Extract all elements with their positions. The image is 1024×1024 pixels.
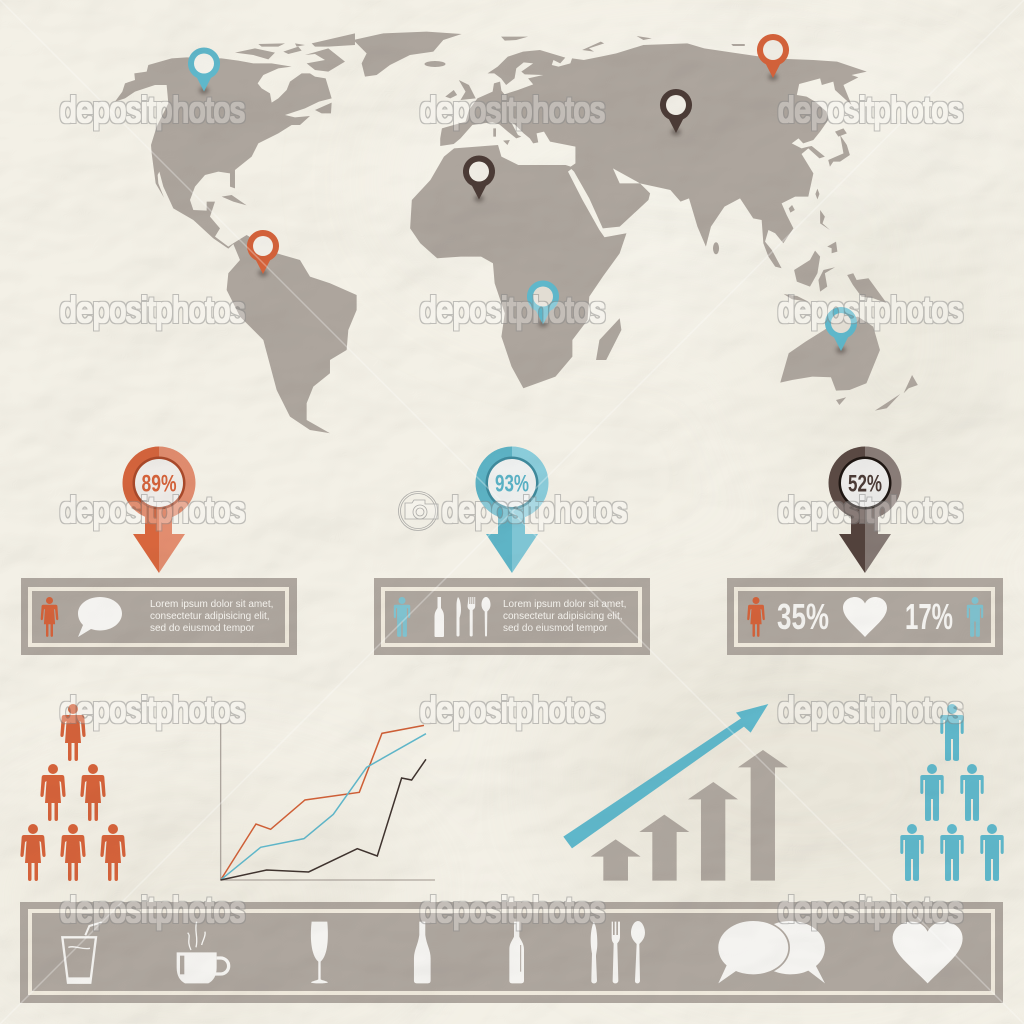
map pin: Australia blue	[825, 307, 857, 354]
panel: love statistics	[727, 578, 1003, 655]
map: Greenland	[353, 32, 462, 77]
growth chart	[563, 704, 788, 881]
map: New Guinea	[847, 273, 887, 303]
text: lorem ipsum: sed do eiusmod tempor	[150, 623, 255, 634]
map: Borneo	[794, 251, 820, 287]
watermark: depositphotos grid: depositphotos	[778, 89, 963, 130]
map pin: Central Asia dark	[660, 89, 692, 136]
map: New Zealand	[875, 375, 918, 411]
big pin: 52 percent dark	[828, 446, 902, 573]
map: Philippines	[820, 210, 837, 253]
text: lorem ipsum: consectetur adipisicing elit,	[503, 611, 623, 622]
watermark: camera logo	[398, 492, 438, 530]
big pin: 52 percent dark: 52%	[848, 470, 882, 498]
arrow: grey bar 4	[738, 750, 788, 881]
icon: spoon	[482, 597, 490, 636]
icon: woman orange	[41, 597, 58, 637]
icon: fork	[467, 597, 475, 636]
map pin: Siberia orange	[757, 34, 789, 80]
map: Australia	[780, 317, 880, 391]
line chart	[221, 723, 435, 880]
icon: knife	[591, 922, 597, 983]
icon: woman orange	[747, 597, 765, 637]
map: Newfoundland and arctic islands	[235, 33, 355, 113]
icon: coffee cup	[177, 922, 229, 983]
map: Japan	[828, 128, 850, 167]
arrow: grey bar 3	[688, 782, 738, 881]
arrow: grey bar 2	[639, 815, 689, 881]
watermark: depositphotos grid: depositphotos	[60, 489, 245, 530]
watermark: depositphotos grid: depositphotos	[60, 289, 245, 330]
icons left part	[62, 922, 431, 983]
arrow: grey bar 1	[591, 839, 641, 881]
map: Sulawesi	[818, 267, 835, 292]
text: lorem ipsum: sed do eiusmod tempor	[503, 623, 608, 634]
map: Arctic islands	[501, 36, 745, 52]
icons right part	[509, 921, 963, 983]
pyramid: men	[900, 704, 1004, 881]
world map	[115, 32, 918, 433]
big pin: 89 percent orange: 89%	[142, 470, 176, 498]
icon: man blue	[394, 597, 410, 637]
text: lorem ipsum: Lorem ipsum dolor sit amet,	[503, 599, 626, 610]
chart axes	[221, 723, 435, 880]
watermark: depositphotos grid: depositphotos	[778, 489, 963, 530]
icon: heart	[843, 597, 887, 637]
icon: speech bubbles	[718, 921, 825, 983]
icon: man blue	[967, 597, 983, 637]
map: Americas	[115, 57, 357, 433]
map: Cuba	[222, 195, 247, 205]
watermark: depositphotos grid: depositphotos	[420, 889, 605, 930]
watermark: depositphotos grid: depositphotos	[778, 689, 963, 730]
text: lorem ipsum: consectetur adipisicing elit,	[150, 611, 270, 622]
watermark: depositphotos grid: depositphotos	[442, 489, 627, 530]
icon: champagne flute	[311, 922, 328, 983]
map: Eurasia and Africa	[410, 36, 918, 411]
map: Madagascar	[596, 318, 621, 360]
icon: heart	[893, 922, 963, 983]
line: orange series	[221, 725, 424, 880]
map: Mediterranean islands	[493, 128, 510, 145]
icon: glass with straw	[62, 922, 102, 983]
watermark: depositphotos grid: depositphotos	[60, 89, 245, 130]
icon: speech bubble	[78, 597, 122, 637]
watermark: depositphotos grid: depositphotos	[778, 889, 963, 930]
map: Iceland	[424, 61, 446, 67]
watermark: depositphotos grid	[60, 89, 963, 930]
panel: icon strip	[20, 902, 1003, 1003]
line: dark series	[221, 759, 426, 880]
stat: 35 percent: 35%	[777, 596, 829, 637]
stat: 17 percent: 17%	[905, 596, 953, 637]
big pin: 89 percent orange	[122, 446, 196, 573]
map pin: North Africa dark	[463, 155, 495, 202]
map pin: South America orange	[247, 230, 279, 276]
map: Java	[784, 294, 808, 302]
map pin: Central Africa blue	[527, 280, 559, 327]
map: Taiwan and Hainan	[789, 189, 819, 213]
icon: knife	[456, 597, 461, 636]
watermark: depositphotos grid: depositphotos	[60, 889, 245, 930]
map: Sri Lanka	[713, 242, 719, 254]
icon: bottle	[434, 597, 444, 637]
watermark: depositphotos grid: depositphotos	[420, 289, 605, 330]
icon: champagne bottle	[414, 922, 431, 983]
watermark: depositphotos grid: depositphotos	[420, 689, 605, 730]
arrow: blue trend	[563, 704, 768, 848]
pyramid: women	[20, 704, 126, 881]
map pin: North America blue	[188, 47, 220, 94]
watermark: depositphotos grid: depositphotos	[420, 89, 605, 130]
panel: cutlery info	[374, 578, 650, 655]
map: Tasmania	[836, 397, 846, 405]
big pin: 93 percent blue: 93%	[495, 470, 529, 498]
watermark: depositphotos grid: depositphotos	[60, 689, 245, 730]
watermark: depositphotos grid: depositphotos	[778, 289, 963, 330]
big pin: 93 percent blue	[476, 446, 548, 573]
panel: speech info	[21, 578, 297, 655]
icon: fork	[612, 922, 620, 983]
icon: spoon	[631, 921, 645, 983]
icon: wine bottle	[509, 922, 524, 983]
map: UK and Ireland	[445, 80, 476, 100]
text: lorem ipsum: Lorem ipsum dolor sit amet,	[150, 599, 273, 610]
line: blue series	[221, 734, 426, 880]
